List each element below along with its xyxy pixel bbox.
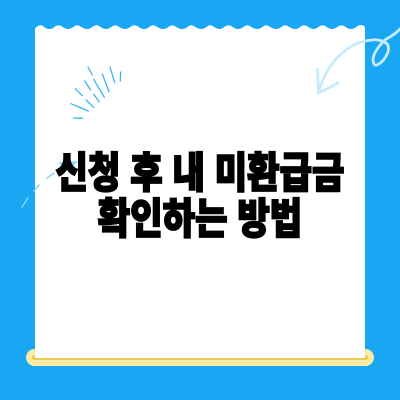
- title: [56, 149, 344, 243]
- icon: sunburst lines: [71, 67, 121, 118]
- yellow bar under card: [26, 349, 374, 366]
- title line 2: 확인하는 방법: [98, 195, 302, 243]
- title line 1: 신청 후 내 미환급금: [56, 149, 344, 197]
- white card with scalloped top: [35, 25, 365, 358]
- icon: dashed arrow left: [22, 162, 76, 207]
- icon: curly arrow top right: [318, 29, 400, 93]
